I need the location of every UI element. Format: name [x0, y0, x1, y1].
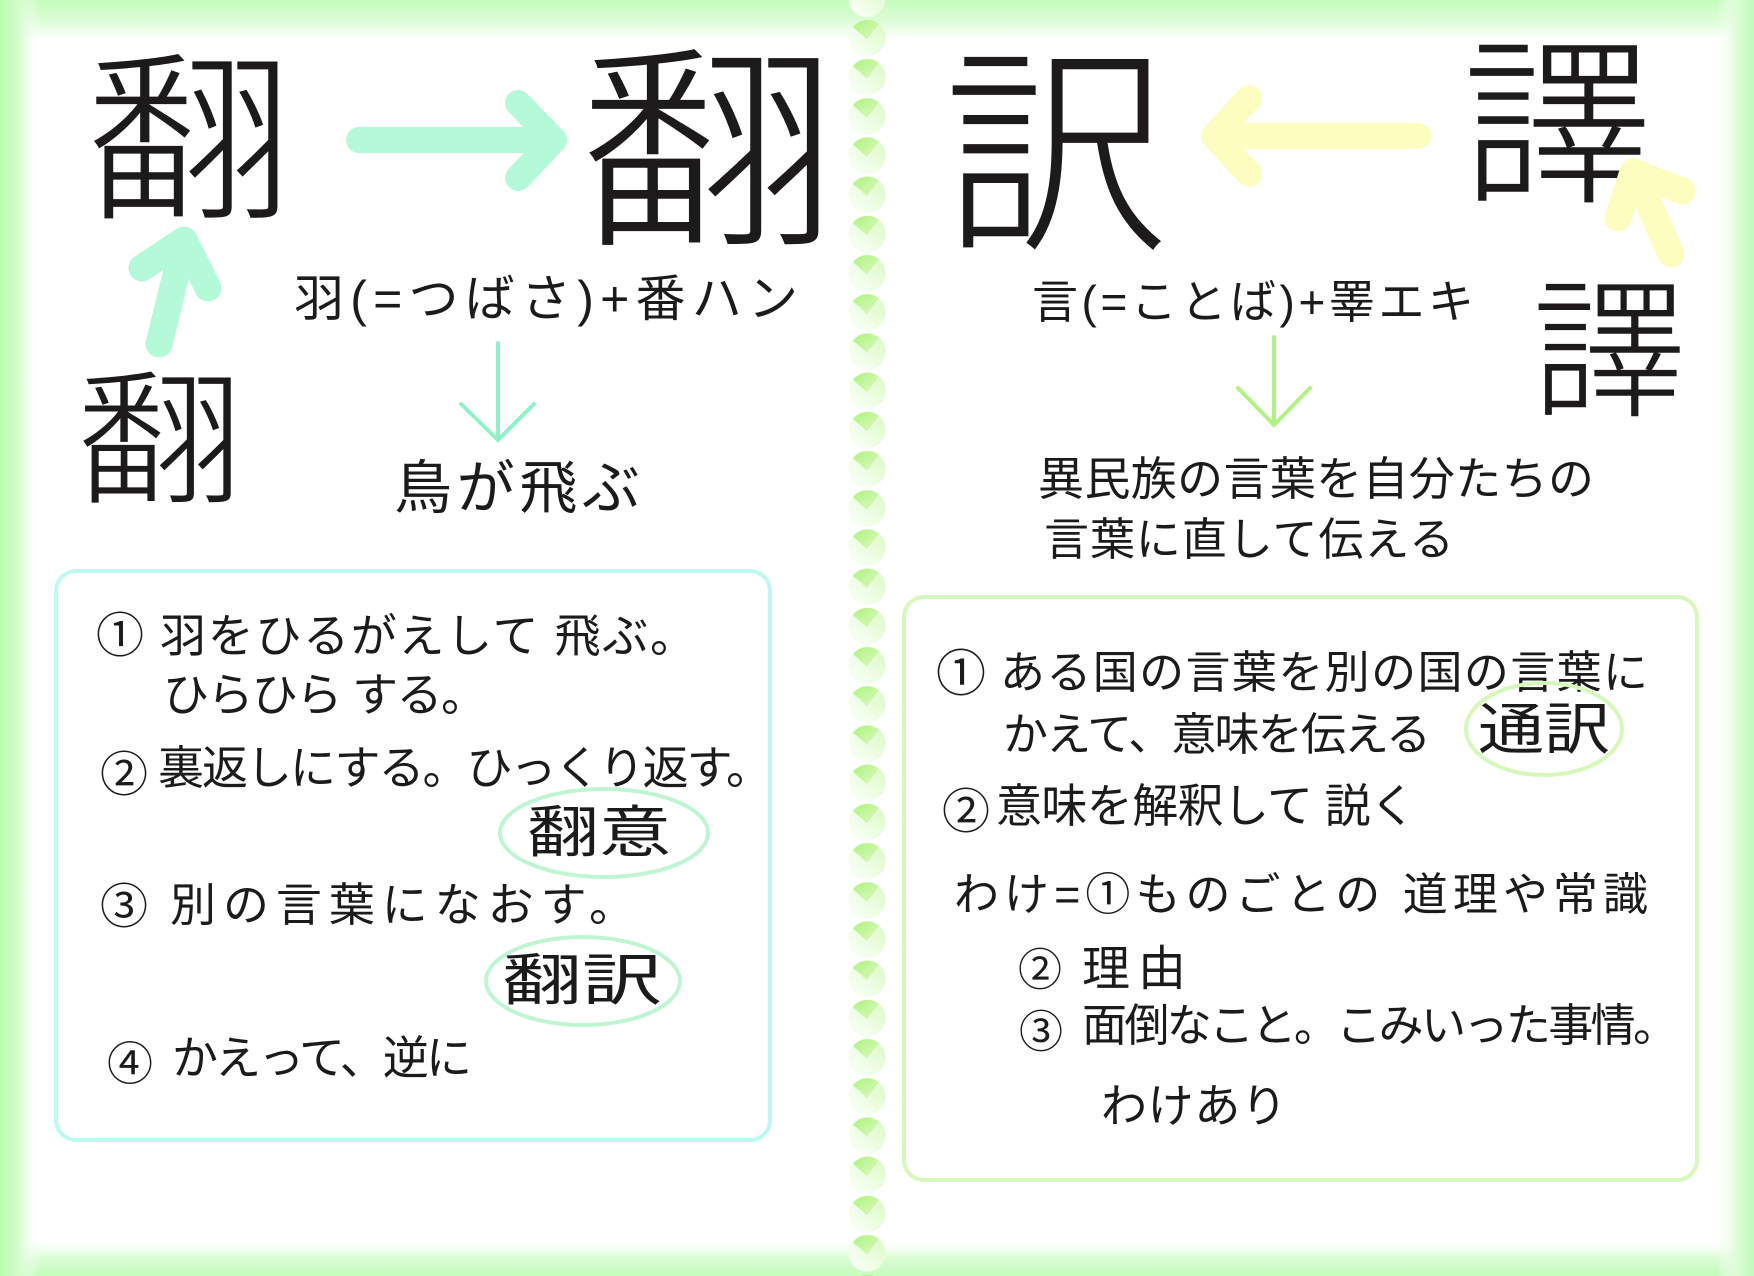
wake definitions	[954, 869, 1678, 1132]
meaning: 鳥が飛ぶ: 鳥が飛ぶ	[394, 456, 640, 521]
seal-style character: 譯: 譯	[1532, 268, 1686, 438]
arrow: thin mint downward	[461, 343, 534, 440]
wake definitions: 面倒なこと。こみいった事情。	[1082, 1000, 1678, 1051]
item 1	[936, 646, 1648, 760]
meaning text: 異民族の言葉を自分たちの	[1038, 453, 1594, 505]
left section: 翻	[76, 33, 839, 523]
item 1: ①	[96, 610, 144, 663]
item 3: ③	[100, 881, 148, 934]
item 3: 別の言葉になおす。	[170, 879, 635, 931]
item 1	[96, 610, 696, 721]
item 1: ①	[936, 646, 986, 702]
meaning text: 言葉に直して伝える	[1044, 514, 1454, 565]
right section: 訳	[943, 26, 1686, 565]
item 1: かえて、意味を伝える	[1003, 709, 1431, 760]
callout: 翻訳	[486, 937, 680, 1025]
item 4: ④	[107, 1038, 153, 1090]
arrow: mint upward	[142, 240, 208, 344]
arrow: yellow to the left	[1214, 98, 1418, 174]
item 1: ある国の言葉を別の国の言葉に	[1000, 647, 1648, 698]
formula: 言 + 睪: 言(=ことば)+睪エキ	[1032, 276, 1474, 328]
arrow: yellow upward	[1618, 172, 1682, 254]
wake definitions: ②	[1018, 946, 1062, 995]
arrow: thin green downward	[1238, 337, 1310, 425]
item 2: 裏返しにする。ひっくり返す。	[158, 742, 772, 794]
arrow: mint to the right	[359, 103, 554, 178]
callout: 翻意	[500, 789, 708, 877]
item 2: ②	[100, 749, 148, 802]
item 4: かえって、逆に	[172, 1032, 472, 1084]
callout: 通訳: 通訳	[1478, 698, 1610, 761]
item 2: 意味を解釈して 説く	[996, 780, 1416, 832]
meaning text	[1038, 453, 1594, 565]
panel: meanings of 翻	[56, 571, 772, 1140]
panel: meanings of 訳	[904, 597, 1697, 1180]
seal-style character: 翻: 翻	[76, 360, 244, 523]
wake definitions: わけあり	[1101, 1080, 1287, 1132]
callout: 翻意: 翻意	[527, 801, 671, 864]
large character: 訳: 訳	[943, 33, 1169, 280]
item 1: 羽をひるがえして 飛ぶ。	[160, 610, 696, 662]
formula: 羽 + 番: 羽(=つばさ)+番ハン	[294, 271, 798, 327]
large character: 翻 regular form: 翻	[85, 39, 294, 244]
callout: 通訳	[1466, 683, 1622, 775]
wake definitions: わけ=①ものごとの 道理や常識	[954, 869, 1648, 920]
wake definitions: ③	[1019, 1008, 1063, 1057]
large character: 譯 traditional form: 譯	[1462, 26, 1652, 228]
wake definitions: 理由	[1082, 943, 1186, 996]
large character: 翻 final form: 翻	[578, 33, 839, 276]
item 1: ひらひら する。	[163, 669, 487, 721]
item 2: ②	[942, 786, 990, 839]
callout: 翻訳: 翻訳	[502, 949, 662, 1012]
centre column of green dots	[845, 0, 889, 1276]
